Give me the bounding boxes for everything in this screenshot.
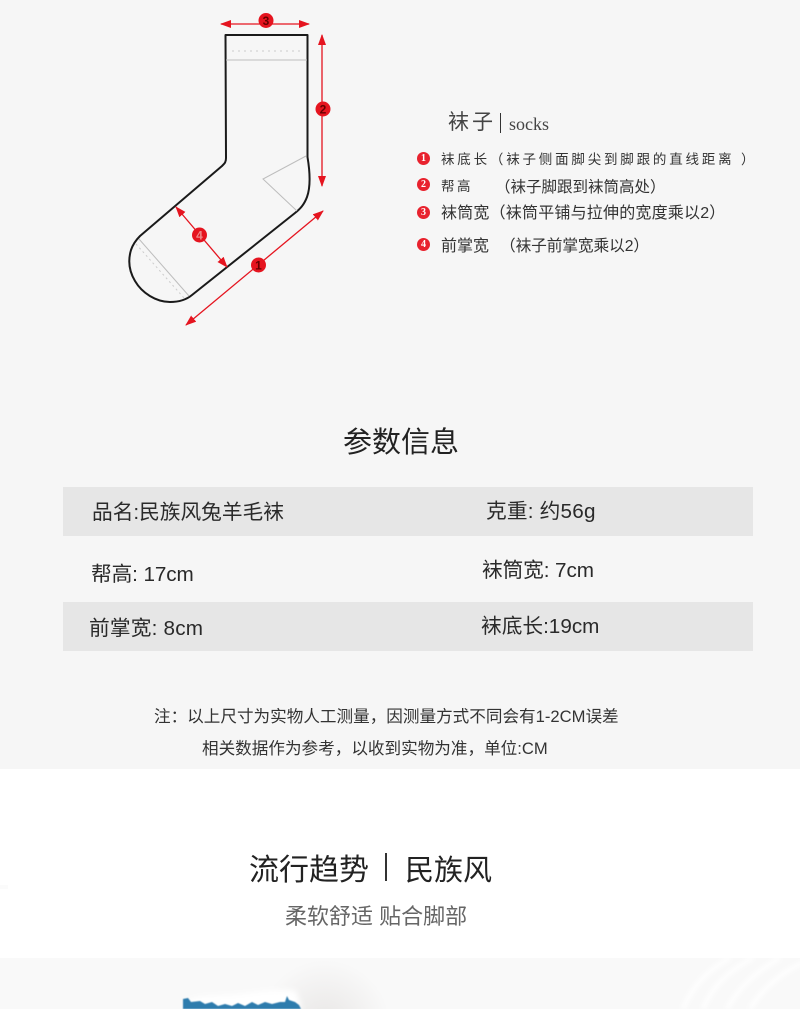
legend item 2: （袜子脚跟到袜筒高处） (495, 179, 666, 196)
heading: parameter information: 参数信息 (343, 427, 459, 459)
note line 2: 相关数据作为参考，以收到实物为准，单位:CM (202, 739, 548, 758)
heading: trend ethnic style (249, 853, 492, 887)
blue sock cuff (183, 996, 301, 1009)
legend item 4: 前掌宽 (441, 238, 489, 255)
photo shadow (301, 987, 360, 1009)
spec: leg height: 帮高: 17cm (91, 563, 194, 586)
measurement arrow 3: cuff width (221, 13, 309, 28)
measurement arrow 4: forefoot width (176, 207, 227, 267)
legend item 2: 2 (421, 179, 426, 190)
spec: weight: 克重: 约56g (486, 500, 596, 523)
heading: trend ethnic style: 民族风 (405, 855, 492, 887)
sock top fluff (272, 992, 300, 1004)
measurement arrow 1: sole length (186, 211, 323, 325)
spec row 3 background (63, 602, 753, 651)
sock size diagram (128, 13, 330, 326)
spec row 1 background (63, 487, 753, 536)
legend heading: socks: socks (509, 114, 549, 134)
legend item 3: 袜筒宽（袜筒平铺与拉伸的宽度乘以2） (441, 205, 726, 222)
sock seam lines (136, 51, 307, 298)
measurement arrow 1: sole length: 1 (255, 258, 262, 272)
legend item 4: 4 (421, 239, 426, 250)
legend item 3: 3 (421, 207, 426, 218)
legend item 4 (417, 237, 649, 255)
sock outline (129, 35, 310, 302)
note line 1: 注：以上尺寸为实物人工测量，因测量方式不同会有1-2CM误差 (154, 707, 619, 726)
measurement arrow 2: leg height (316, 35, 330, 186)
legend item 4: （袜子前掌宽乘以2） (500, 238, 649, 255)
ripples (683, 958, 800, 1009)
legend item 1: 袜底长（袜子侧面脚尖到脚跟的直线距离 ） (441, 152, 757, 167)
subheading: soft and comfortable: 柔软舒适 贴合脚部 (285, 904, 467, 929)
panel: size specifications background (0, 0, 800, 769)
legend item 2 (417, 178, 666, 196)
legend list (417, 152, 757, 255)
legend heading: socks: 袜子 (448, 111, 496, 134)
measurement arrow 2: leg height: 2 (320, 102, 327, 116)
spec: sole length: 袜底长:19cm (481, 615, 599, 638)
legend item 1: 1 (421, 153, 426, 164)
product photo strip (182, 967, 380, 1009)
measurement arrow 3: cuff width: 3 (263, 14, 270, 28)
legend item 2: 帮高 (441, 179, 473, 194)
heading: trend ethnic style: 流行趋势 (249, 854, 369, 887)
spec: forefoot width: 前掌宽: 8cm (89, 617, 203, 640)
faint mark at left edge (0, 885, 8, 889)
measurement arrow 4: forefoot width: 4 (196, 228, 203, 242)
spec: cuff width: 袜筒宽: 7cm (482, 559, 594, 582)
legend heading: socks (448, 111, 549, 134)
spec: product name: 品名:民族风兔羊毛袜 (92, 501, 284, 524)
